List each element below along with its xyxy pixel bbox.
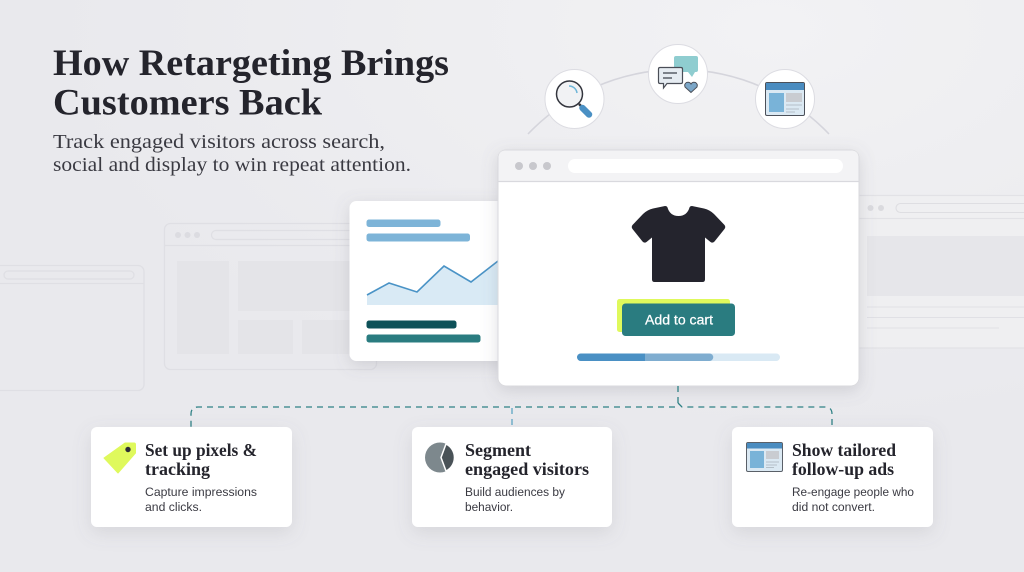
ghost browser window: right — [859, 195, 1024, 348]
icon: display ad window — [756, 70, 814, 128]
panel: main browser window — [498, 150, 859, 386]
card heading — [465, 440, 589, 479]
channel arc — [528, 70, 829, 134]
card heading: engaged visitors — [465, 459, 589, 479]
title — [53, 43, 449, 124]
progress bar — [577, 354, 780, 361]
card description: and clicks. — [145, 500, 202, 514]
subtitle — [53, 131, 411, 176]
ghost browser window: far left — [0, 266, 144, 390]
card heading: follow-up ads — [792, 459, 894, 479]
card description: Build audiences by — [465, 485, 566, 499]
subtitle: Track engaged visitors across search, — [53, 131, 385, 153]
dashed connectors — [191, 386, 832, 427]
card description: did not convert. — [792, 500, 875, 514]
icon: t-shirt — [632, 206, 725, 282]
card description — [465, 485, 566, 514]
title: How Retargeting Brings — [53, 43, 449, 84]
panel: analytics card — [350, 201, 520, 361]
card heading: Show tailored — [792, 440, 896, 460]
card heading — [145, 440, 257, 479]
title: Customers Back — [53, 82, 322, 124]
card: segment engaged visitors — [412, 427, 612, 527]
add to cart button — [617, 299, 735, 336]
card heading: Segment — [465, 440, 531, 460]
card heading — [792, 440, 896, 479]
icon: social chat bubbles — [648, 44, 708, 104]
icon: ad window — [746, 442, 782, 472]
browser toolbar — [498, 150, 859, 182]
card description: Re-engage people who — [792, 485, 914, 499]
icon: price tag — [104, 443, 136, 473]
subtitle: social and display to win repeat attention. — [53, 154, 411, 176]
analytics footer bars — [366, 320, 480, 342]
card: show tailored follow-up ads — [732, 427, 933, 527]
card: set up pixels and tracking — [91, 427, 292, 527]
icon: segmented pie — [425, 442, 455, 472]
area line chart — [367, 261, 498, 305]
analytics header bars — [366, 220, 470, 242]
card description: Capture impressions — [145, 485, 257, 499]
card description: behavior. — [465, 500, 513, 514]
card heading: Set up pixels & — [145, 440, 257, 460]
icon: search magnifier — [545, 70, 604, 128]
card description — [792, 485, 914, 514]
card heading: tracking — [145, 459, 210, 479]
add to cart button: Add to cart — [645, 312, 713, 328]
card description — [145, 485, 257, 514]
ghost browser window: center left — [164, 224, 376, 370]
